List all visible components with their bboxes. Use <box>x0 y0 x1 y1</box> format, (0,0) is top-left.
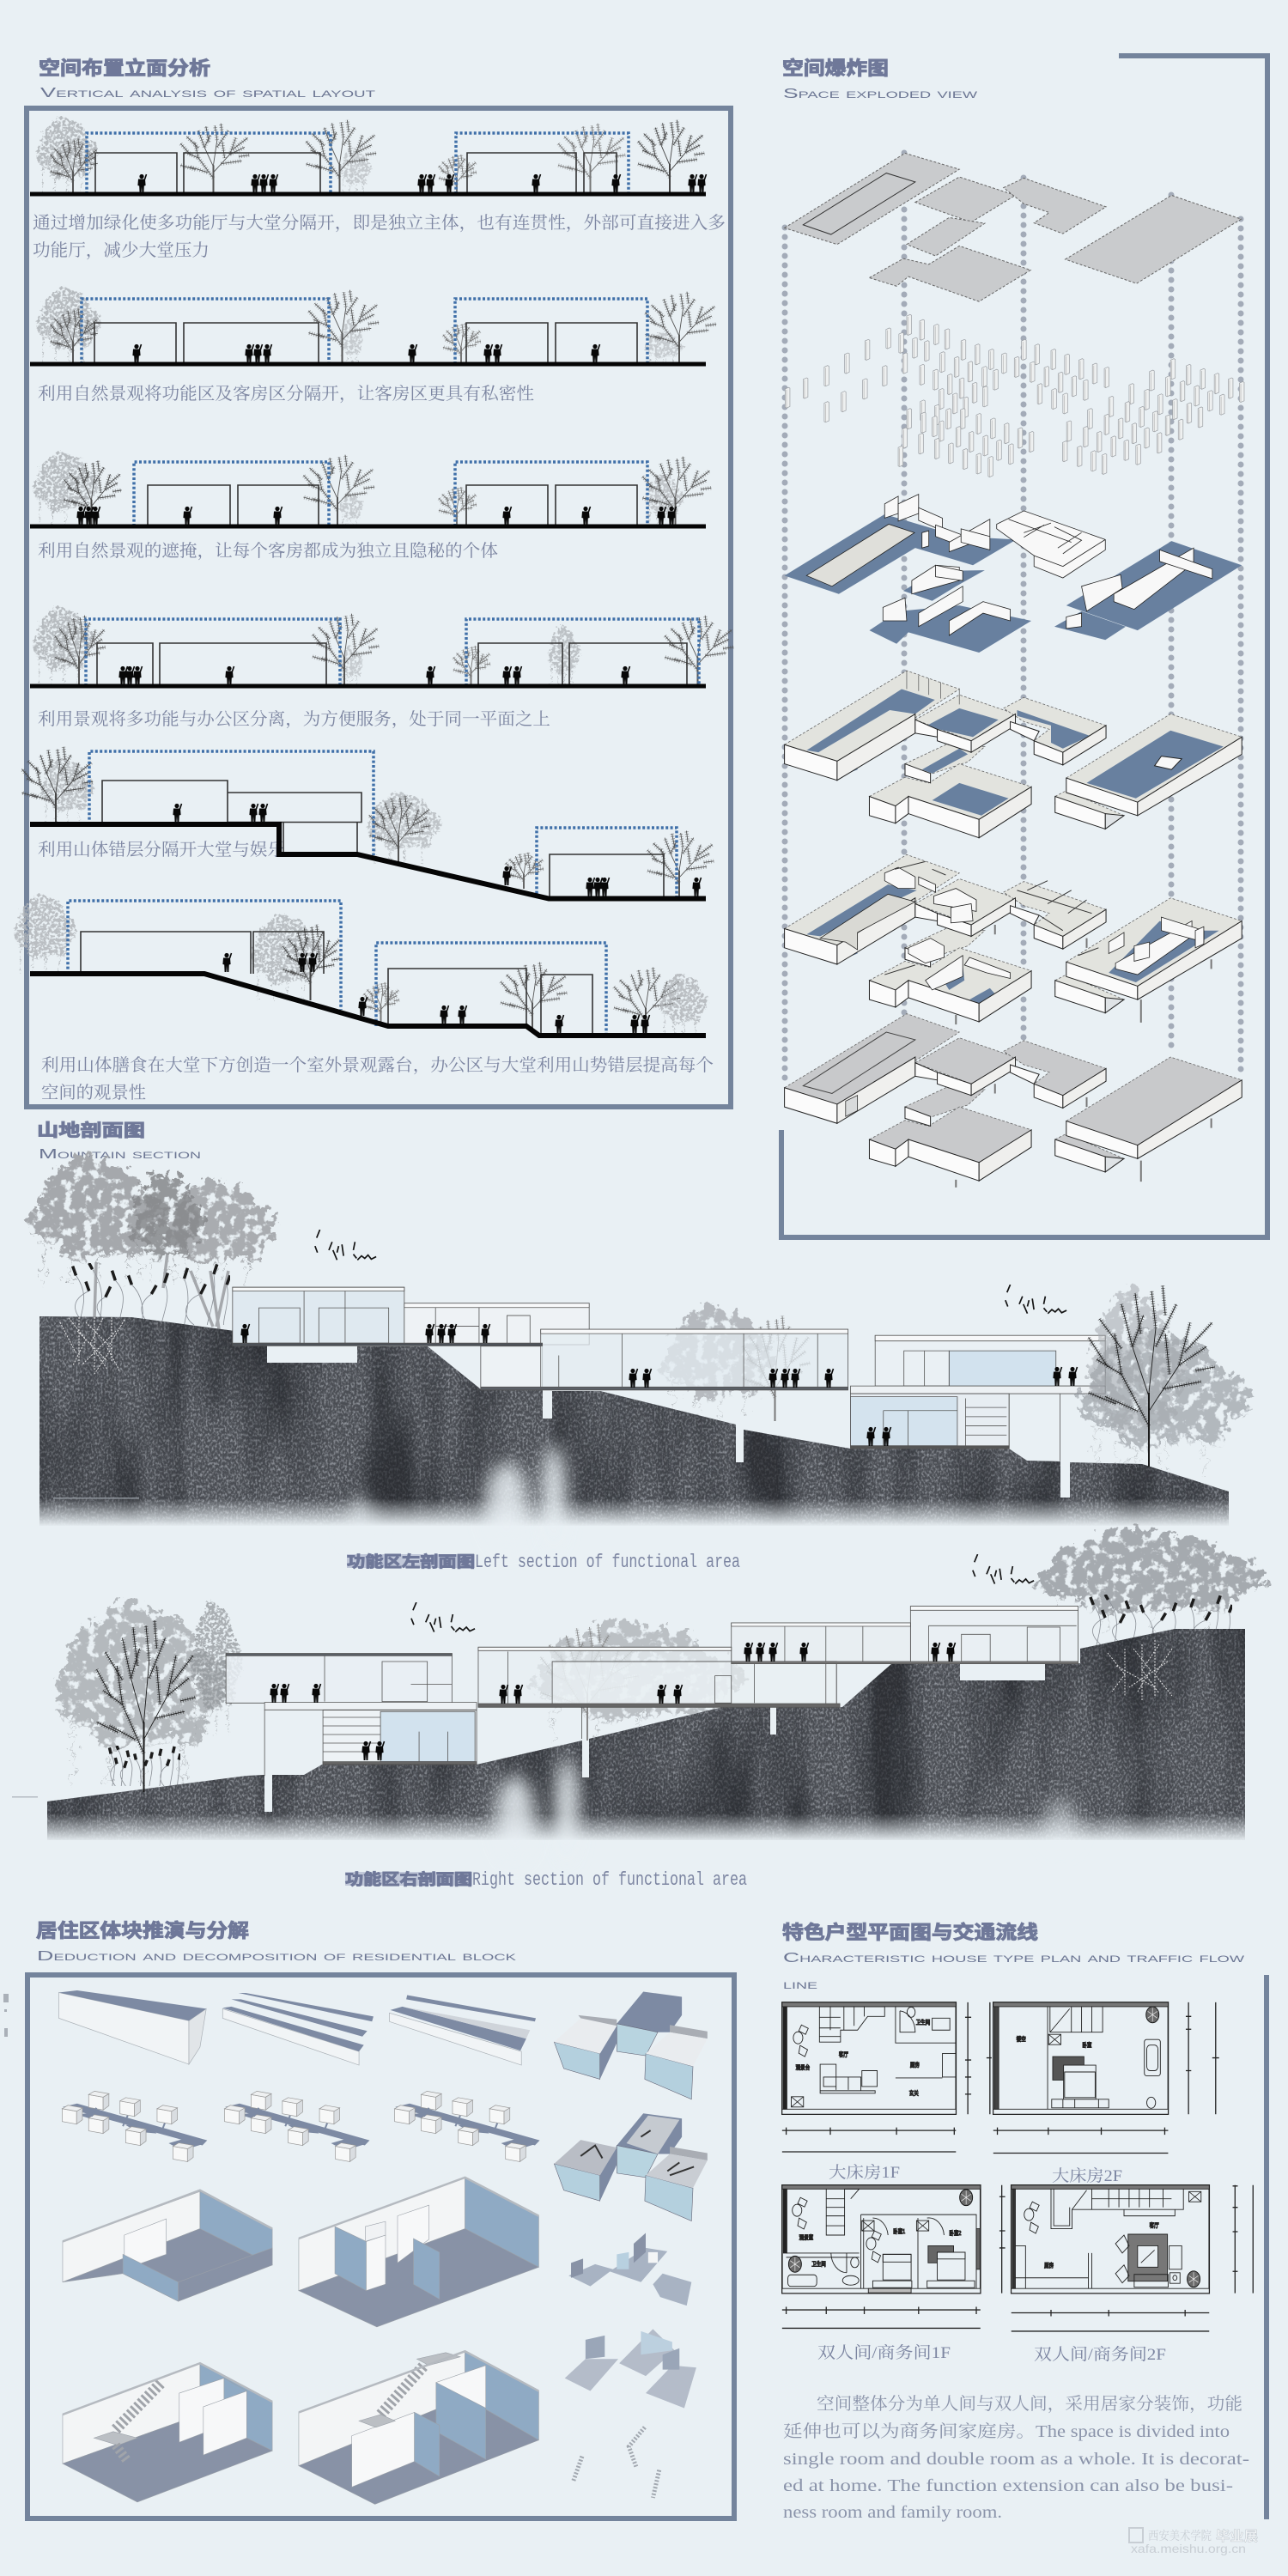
label: king 2F: 大床房2F <box>1052 2166 1122 2185</box>
heading: house type plan <box>782 1922 1245 1992</box>
panel: vertical analysis frame <box>27 108 731 1107</box>
floor plan: twin room 1F: 卧室2 <box>949 2228 962 2237</box>
exploded layer: roof slabs <box>785 153 1241 301</box>
exploded layer: interior rooms <box>785 854 1242 1024</box>
heading: exploded view <box>782 58 978 101</box>
right section: mist fade <box>12 1759 1249 1865</box>
floor plan: king room 1F: 观景台 <box>796 2063 810 2071</box>
row 4 text: 利用景观将多功能与办公区分离，为方便服务，处于同一平面之上 <box>38 709 550 729</box>
heading: vertical analysis: 空间布置立面分析 <box>39 58 210 79</box>
right section: dark tree <box>96 1620 196 1792</box>
caption: left section: Left section of functional area <box>475 1552 740 1573</box>
heading: vertical analysis <box>39 58 375 100</box>
row 4 section diagram <box>30 606 733 686</box>
heading: residential block: Deduction and decomposition of residential block <box>37 1949 517 1964</box>
caption: left section <box>347 1552 740 1573</box>
left section: trees behind <box>30 1156 810 1421</box>
heading: mountain section: Mountain section <box>39 1147 201 1162</box>
floor plan: king room 2F: 卧室 <box>1082 2040 1091 2049</box>
panel: residential block frame <box>27 1975 734 2518</box>
right section: people <box>270 1643 955 1760</box>
heading: mountain section: 山地剖面图 <box>37 1121 145 1140</box>
description paragraph: ness room and family room. <box>783 2503 1002 2522</box>
watermark: xafa.meishu.org.cn <box>1131 2542 1246 2555</box>
room B <box>299 2178 538 2327</box>
room D <box>299 2351 538 2504</box>
description paragraph: 延伸也可以为商务间家庭房。The space is divided into <box>783 2421 1230 2441</box>
caption: left section: 功能区左剖面图 <box>347 1552 475 1571</box>
left section: mountain <box>34 1309 1236 1533</box>
birds <box>315 1230 1066 1632</box>
floor plan: king room 2F: 镂空 <box>1017 2034 1026 2043</box>
floor plan: king room 1F: 客厅 <box>839 2050 848 2058</box>
heading: exploded view: Space exploded view <box>783 87 978 101</box>
heading: residential block: 居住区体块推演与分解 <box>36 1920 249 1941</box>
caption: right section <box>345 1869 747 1891</box>
row 1 text: 通过增加绿化使多功能厅与大堂分隔开，即是独立主体，也有连贯性，外部可直接进入多 <box>33 213 726 233</box>
label: twin 1F: 双人间/商务间1F <box>817 2343 951 2362</box>
watermark <box>1129 2528 1258 2555</box>
decomposed stairs <box>574 2427 659 2498</box>
right section: trees behind <box>55 1530 1267 1786</box>
right section: mountain <box>43 1623 1249 1846</box>
row 5 text: 利用山体错层分隔开大堂与娱乐 <box>38 840 286 860</box>
description paragraph: single room and double room as a whole. It is decorat- <box>783 2450 1249 2469</box>
massing diagram: house volume <box>554 1991 708 2099</box>
floor plan: king room 1F: 玄关 <box>909 2088 919 2097</box>
heading: house type plan: line <box>783 1978 817 1992</box>
dotted vertical guide lines <box>785 153 1241 1084</box>
right section: building <box>226 1607 1078 1776</box>
row 2 section diagram <box>30 287 716 364</box>
floor plan: twin room 1F: 卧室1 <box>893 2227 906 2235</box>
heading: exploded view: 空间爆炸图 <box>782 58 889 79</box>
decomposed floors <box>565 2233 696 2408</box>
label: king 1F: 大床房1F <box>829 2163 900 2182</box>
left section: building <box>233 1287 1105 1461</box>
massing diagrams row 2 <box>62 2091 540 2161</box>
floor plan: twin room 2F: 厨房 <box>1044 2261 1054 2269</box>
floor plan: king room 2F <box>993 2002 1219 2153</box>
room A <box>63 2190 272 2301</box>
description paragraph <box>783 2394 1249 2522</box>
panel: right rule <box>1264 1975 1269 2519</box>
heading: residential block <box>36 1920 517 1964</box>
row 3 section diagram <box>30 452 711 526</box>
label: twin 2F: 双人间/商务间2F <box>1034 2345 1166 2364</box>
exploded layer: blue floors and interior walls <box>785 495 1242 653</box>
massing diagrams row 1 <box>58 1990 536 2065</box>
caption: right section: Right section of functional area <box>472 1869 747 1891</box>
floor plan: king room 1F: 卫生间 <box>916 2018 930 2026</box>
row 5 section diagram <box>21 747 714 898</box>
row 6 text: 空间的观景性 <box>41 1083 146 1103</box>
heading: house type plan: 特色户型平面图与交通流线 <box>782 1922 1038 1943</box>
panel: exploded view frame <box>781 56 1267 1237</box>
watermark: 西安美术学院 <box>1148 2529 1212 2543</box>
left section: people <box>240 1324 1077 1446</box>
caption: right section: 功能区右剖面图 <box>345 1870 472 1888</box>
floor plan: twin room 1F: 观景室 <box>799 2233 813 2241</box>
room C <box>63 2363 272 2502</box>
row 6 text <box>41 1055 714 1103</box>
heading: vertical analysis: Vertical analysis of spatial layout <box>40 86 375 100</box>
massing diagram: house interior <box>554 2113 708 2221</box>
row 1 text <box>33 213 726 260</box>
description paragraph: 空间整体分为单人间与双人间，采用居家分装饰，功能 <box>817 2394 1242 2414</box>
floor plan: twin room 2F: 客厅 <box>1150 2221 1159 2229</box>
row 1 section diagram <box>30 117 706 194</box>
heading: house type plan: Characteristic house type plan and traffic flow <box>783 1951 1245 1965</box>
floor plan: king room 1F: 厨房 <box>910 2060 920 2069</box>
side marks <box>3 1994 9 2037</box>
exploded layer: walls upper storey <box>785 671 1242 838</box>
floor plan: twin room 1F: 卫生间 <box>811 2259 826 2268</box>
floor plan: twin room 1F <box>782 2185 981 2328</box>
left section: mist fade <box>34 1445 1236 1552</box>
exploded layer: columns <box>785 314 1244 477</box>
row 3 text: 利用自然景观的遮掩，让每个客房都成为独立且隐秘的个体 <box>38 541 498 561</box>
watermark: 毕业展 <box>1216 2529 1258 2544</box>
heading: mountain section <box>37 1121 201 1162</box>
row 6 text: 利用山体膳食在大堂下方创造一个室外景观露台，办公区与大堂利用山势错层提高每个 <box>41 1055 714 1075</box>
floor plan: twin room 2F <box>999 2185 1253 2331</box>
floor plan: king room 1F <box>782 2002 992 2152</box>
description paragraph: ed at home. The function extension can also be busi- <box>783 2476 1233 2495</box>
row 2 text: 利用自然景观将功能区及客房区分隔开，让客房区更具有私密性 <box>38 384 534 404</box>
exploded layer: ground roof volumes <box>785 1014 1242 1188</box>
row 6 section diagram <box>14 894 708 1036</box>
left section: trees right <box>1079 1285 1250 1475</box>
row 1 text: 功能厅，减少大堂压力 <box>33 240 210 260</box>
room diagrams <box>63 2178 538 2504</box>
